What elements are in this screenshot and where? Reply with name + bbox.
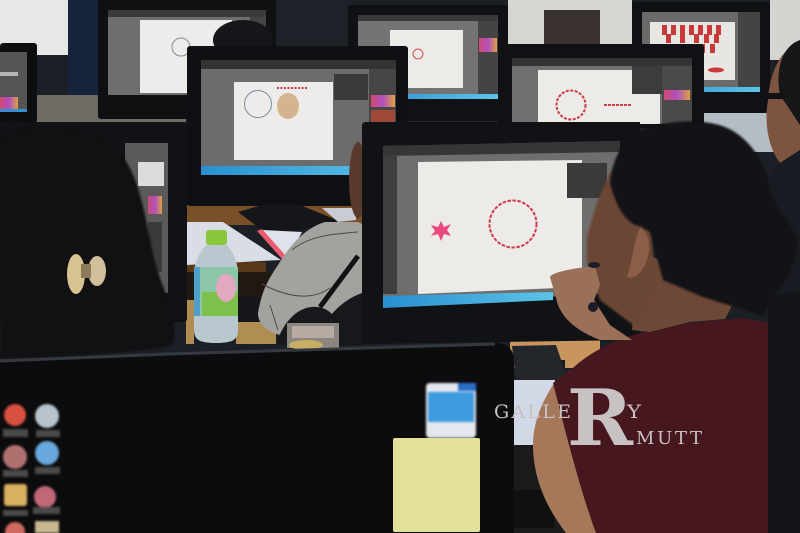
monitor: top right with red figures — [632, 2, 770, 113]
ear — [627, 228, 649, 278]
monitor: mid right — [498, 44, 704, 128]
monitor stand — [238, 205, 342, 231]
icons: dark nail polish — [588, 262, 600, 312]
dark chair at right edge — [768, 291, 800, 533]
monitor: top left — [98, 0, 276, 119]
watermark: MUTT — [636, 428, 702, 449]
person: center with knit sweater — [258, 142, 367, 335]
monitor: front main — [362, 122, 640, 344]
hair and bun — [610, 121, 797, 316]
monitor: center — [187, 46, 408, 206]
hand — [550, 266, 632, 340]
arm — [533, 370, 600, 533]
person: man at right edge — [762, 40, 800, 300]
watermark — [494, 373, 702, 464]
keyboard under desk — [238, 297, 263, 322]
icon: hair clip — [67, 254, 106, 294]
shirt — [553, 318, 768, 533]
icon: blue app tile — [426, 383, 476, 438]
back row person head — [213, 20, 273, 60]
watermark: Y — [626, 401, 642, 423]
icon: pink star on artboard — [431, 221, 451, 241]
desktop icons — [3, 404, 60, 533]
sticky note — [393, 438, 480, 532]
headphones and container on desk — [276, 292, 366, 350]
person: right, woman with hair bun — [533, 121, 797, 533]
monitor: top center — [348, 5, 508, 121]
watermark: GALLE — [494, 401, 571, 423]
monitor: bottom foreground with desktop icons — [0, 343, 514, 533]
monitor: far left — [0, 43, 37, 123]
watermark: R — [567, 373, 634, 464]
notebook and paper on desk — [512, 345, 568, 528]
desk surfaces — [186, 205, 600, 533]
face — [587, 165, 655, 328]
papers on desk — [187, 208, 356, 265]
water bottle — [194, 230, 238, 343]
person: left, dark hair from behind — [0, 126, 175, 358]
monitor: left — [0, 122, 187, 322]
neck — [632, 250, 735, 332]
